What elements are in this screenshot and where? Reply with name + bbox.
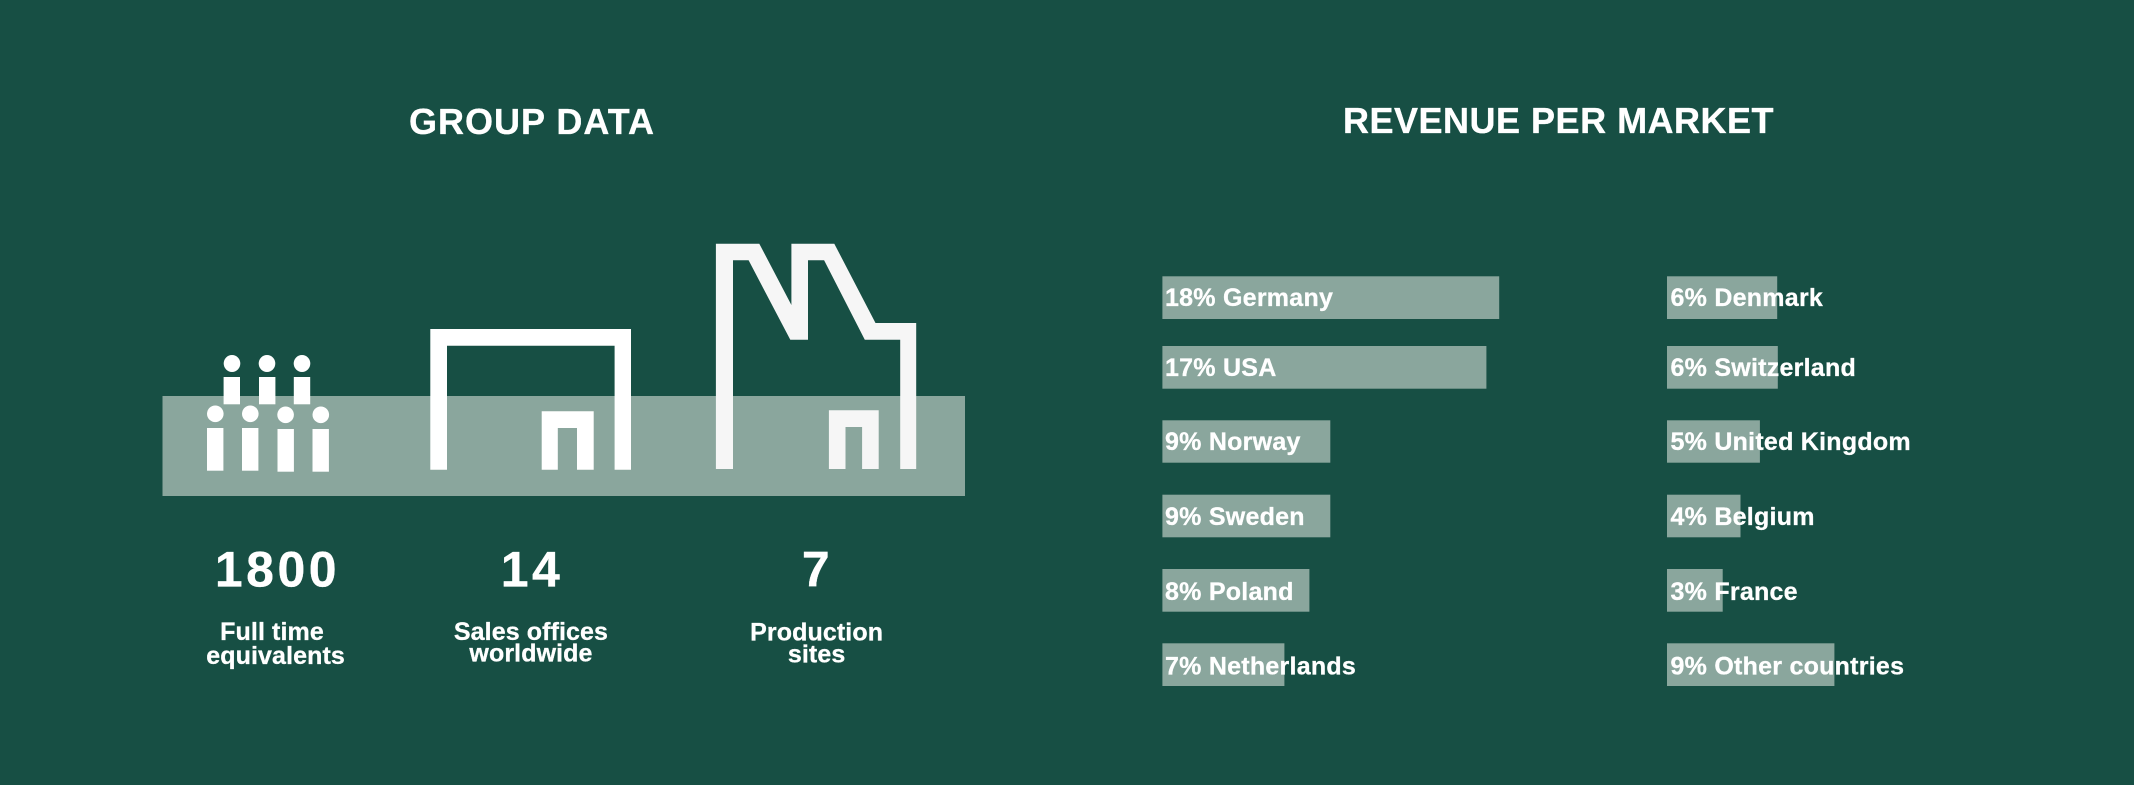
stat: production sites	[750, 542, 883, 669]
bar: Belgium	[1667, 495, 1815, 537]
bar: USA: 17% USA	[1165, 354, 1277, 382]
icon: sales office	[430, 329, 631, 470]
bar: Norway: 9% Norway	[1165, 428, 1301, 456]
bar: Sweden: 9% Sweden	[1165, 503, 1305, 531]
bar: Switzerland: 6% Switzerland	[1670, 354, 1856, 382]
bar: Poland	[1162, 569, 1309, 612]
bar: Germany	[1162, 276, 1499, 319]
bar: Switzerland	[1667, 346, 1856, 389]
bar: United Kingdom	[1667, 420, 1911, 463]
icon: people	[207, 355, 329, 472]
bar: Denmark	[1667, 276, 1823, 319]
stat: sales offices	[454, 542, 608, 668]
bar: Netherlands: 7% Netherlands	[1165, 652, 1356, 680]
bar: Belgium: 4% Belgium	[1670, 503, 1815, 531]
stat: production sites: sites	[788, 641, 845, 669]
bar: Sweden	[1162, 495, 1330, 537]
stat: production sites: Production	[750, 619, 883, 647]
heading: group data: GROUP DATA	[409, 101, 655, 142]
bar: France	[1667, 569, 1798, 612]
bar: United Kingdom: 5% United Kingdom	[1670, 428, 1911, 456]
stat: sales offices: 14	[501, 542, 563, 598]
bar: Denmark: 6% Denmark	[1670, 284, 1823, 312]
stat: full time equivalents	[206, 542, 345, 670]
heading: revenue per market: REVENUE PER MARKET	[1343, 100, 1774, 141]
bar: France: 3% France	[1670, 578, 1798, 606]
bar: Other countries: 9% Other countries	[1670, 652, 1904, 680]
ground band	[162, 396, 965, 496]
stat: sales offices: Sales offices	[454, 618, 608, 646]
stat: full time equivalents: Full time	[220, 618, 324, 646]
bar: USA	[1162, 346, 1486, 389]
bar: Netherlands	[1162, 643, 1356, 686]
panel: group data illustration	[162, 244, 965, 496]
stat: full time equivalents: 1800	[215, 542, 340, 598]
stat: full time equivalents: equivalents	[206, 642, 345, 670]
bar: Other countries	[1667, 643, 1904, 686]
bar: Poland: 8% Poland	[1165, 578, 1294, 606]
icon: factory	[716, 244, 916, 469]
stat: production sites: 7	[802, 542, 833, 598]
stat: sales offices: worldwide	[468, 640, 593, 668]
bar: Germany: 18% Germany	[1165, 284, 1333, 312]
bar: Norway	[1162, 420, 1330, 463]
bar chart: revenue left column	[1162, 276, 1499, 686]
bar chart: revenue right column	[1667, 276, 1911, 686]
